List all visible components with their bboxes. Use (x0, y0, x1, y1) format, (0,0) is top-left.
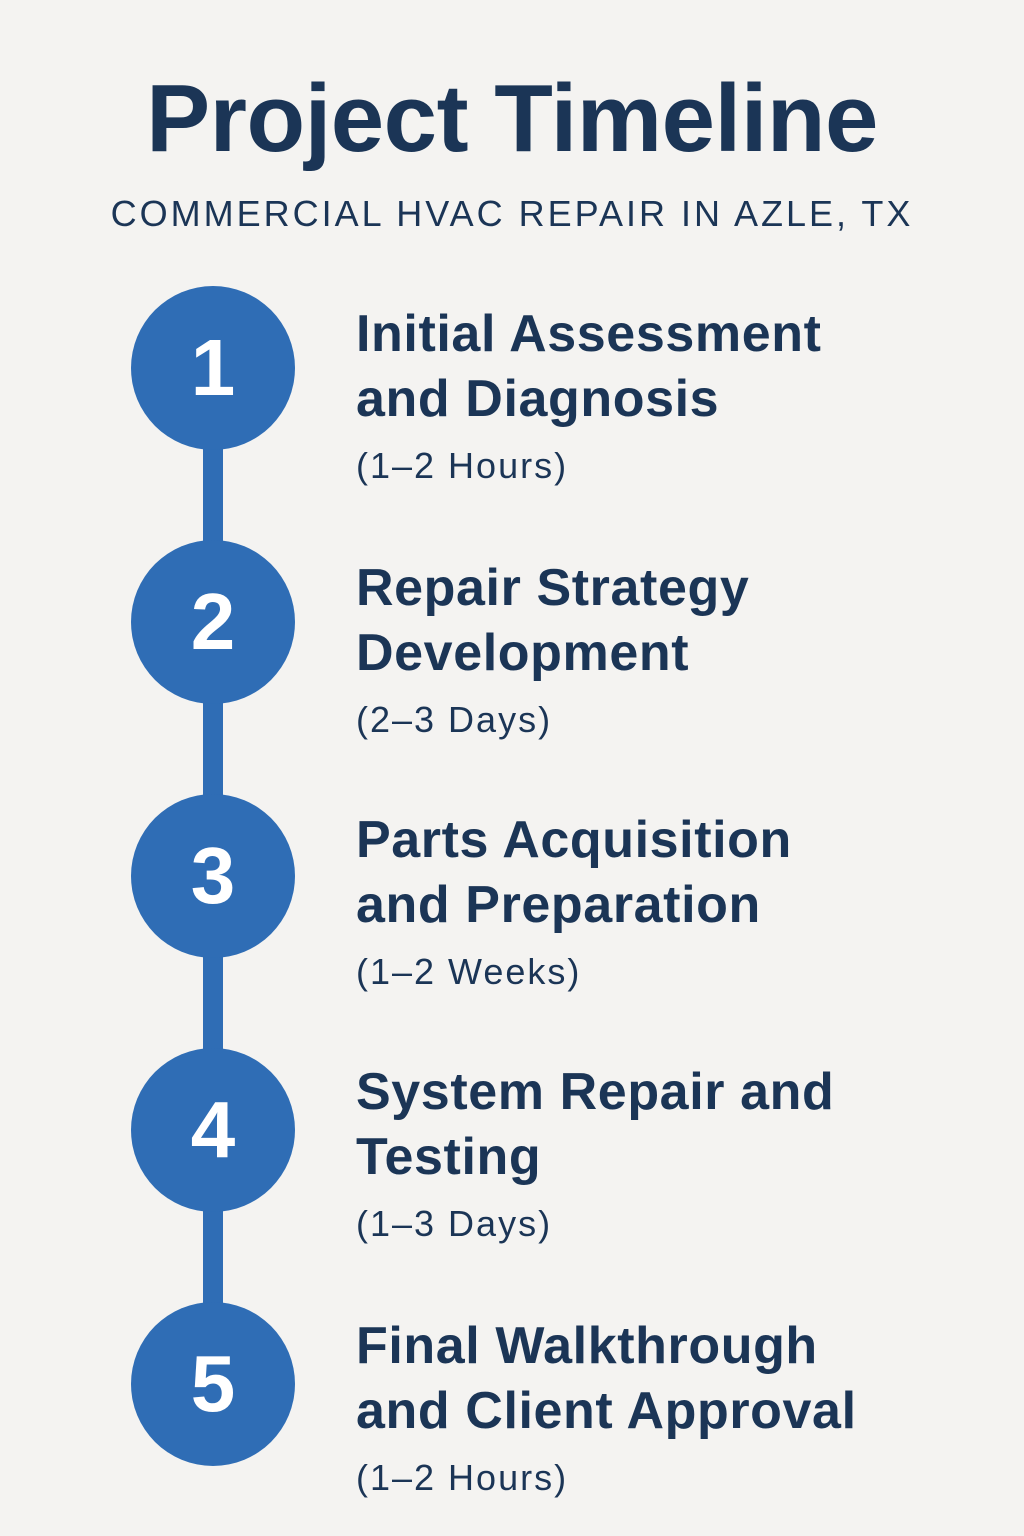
subtitle: COMMERCIAL HVAC REPAIR IN AZLE, TX (111, 193, 913, 234)
step 3 text: Parts Acquisition (356, 811, 792, 869)
step 4 text (356, 1063, 834, 1244)
step 3 circle (131, 794, 295, 958)
step 3 circle: 3 (191, 831, 235, 920)
step 2 text: (2–3 Days) (356, 699, 552, 740)
step 1 circle: 1 (191, 323, 235, 412)
step 1 text: Initial Assessment (356, 305, 822, 363)
step 2 text: Repair Strategy (356, 559, 749, 617)
step 5 text: and Client Approval (356, 1382, 857, 1440)
step 5 circle (131, 1302, 295, 1466)
step 5 text: (1–2 Hours) (356, 1457, 568, 1498)
step 2 text (356, 559, 749, 740)
step 5 text (356, 1317, 857, 1498)
step 4 circle: 4 (191, 1085, 235, 1174)
timeline connector line (203, 368, 223, 1384)
step 1 text (356, 305, 822, 486)
step 4 text: (1–3 Days) (356, 1203, 552, 1244)
step 1 text: (1–2 Hours) (356, 445, 568, 486)
step 1 text: and Diagnosis (356, 370, 719, 428)
step 4 circle (131, 1048, 295, 1212)
step 1 circle (131, 286, 295, 450)
step 2 text: Development (356, 624, 689, 682)
step 4 text: System Repair and (356, 1063, 834, 1121)
step 2 circle: 2 (191, 577, 235, 666)
step 5 text: Final Walkthrough (356, 1317, 818, 1375)
step 3 text (356, 811, 792, 992)
step 3 text: (1–2 Weeks) (356, 951, 581, 992)
step 4 text: Testing (356, 1128, 541, 1186)
title: Project Timeline (146, 65, 878, 172)
step 2 circle (131, 540, 295, 704)
step 3 text: and Preparation (356, 876, 761, 934)
step 5 circle: 5 (191, 1339, 235, 1428)
